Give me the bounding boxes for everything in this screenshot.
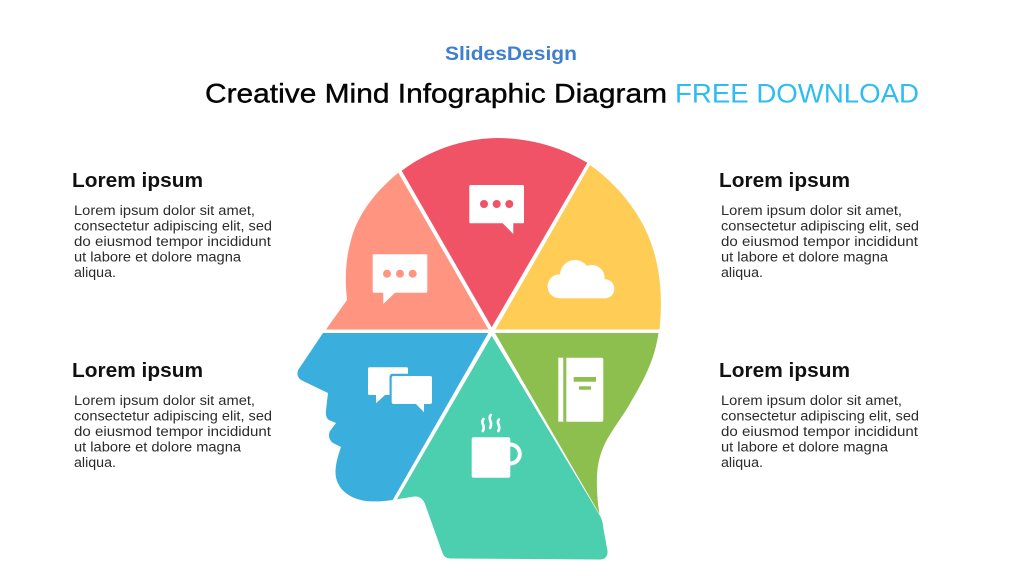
- icon: notebook: [558, 358, 603, 422]
- segment: salmon: [326, 173, 488, 330]
- icon: speech bubble red: [469, 185, 524, 234]
- brand name: SlidesDesign: [445, 43, 577, 65]
- text block: top left: consectetur adipiscing elit, sed: [74, 218, 272, 234]
- text block: top right: aliqua.: [721, 265, 763, 280]
- icon: chat bubbles: [368, 367, 434, 412]
- icon: coffee mug: [472, 415, 520, 478]
- title: [205, 78, 919, 108]
- text block: bottom left: ut labore et dolore magna: [74, 440, 242, 454]
- text block: top left: [72, 170, 272, 280]
- text block: bottom right: Lorem ipsum dolor sit amet,: [721, 393, 902, 408]
- text block: top right: Lorem ipsum: [719, 170, 850, 192]
- text block: bottom right: aliqua.: [721, 455, 763, 470]
- text block: bottom left: Lorem ipsum: [72, 360, 203, 382]
- text block: bottom left: [72, 360, 272, 470]
- segment: green: [495, 333, 658, 514]
- text block: top right: consectetur adipiscing elit, sed: [721, 218, 919, 234]
- text block: top left: ut labore et dolore magna: [74, 250, 242, 264]
- segment: yellow: [496, 165, 661, 330]
- segment: red: [402, 138, 587, 327]
- segment: teal: [397, 336, 608, 560]
- text block: bottom left: aliqua.: [74, 455, 116, 470]
- icon: cloud: [548, 260, 614, 298]
- text block: top right: do eiusmod tempor incididunt: [721, 234, 918, 249]
- text block: bottom left: Lorem ipsum dolor sit amet,: [74, 393, 255, 408]
- title: Creative Mind Infographic Diagram: [205, 78, 667, 108]
- head diagram: [297, 138, 661, 560]
- text block: top left: Lorem ipsum dolor sit amet,: [74, 203, 255, 218]
- text block: bottom left: consectetur adipiscing elit, sed: [74, 408, 272, 424]
- text block: bottom right: consectetur adipiscing elit, sed: [721, 408, 919, 424]
- text block: top left: do eiusmod tempor incididunt: [74, 234, 271, 249]
- text block: top right: Lorem ipsum dolor sit amet,: [721, 203, 902, 218]
- icon: speech bubble salmon: [373, 254, 427, 304]
- text block: top left: aliqua.: [74, 265, 116, 280]
- text block: bottom right: Lorem ipsum: [719, 360, 850, 382]
- text block: bottom left: do eiusmod tempor incididunt: [74, 424, 271, 439]
- text block: top right: [719, 170, 919, 280]
- text block: bottom right: ut labore et dolore magna: [721, 440, 889, 454]
- text block: bottom right: [719, 360, 919, 470]
- text block: top right: ut labore et dolore magna: [721, 250, 889, 264]
- segment: blue: [297, 333, 488, 501]
- text block: bottom right: do eiusmod tempor incididunt: [721, 424, 918, 439]
- text block: top left: Lorem ipsum: [72, 170, 203, 192]
- title: FREE DOWNLOAD: [675, 78, 919, 108]
